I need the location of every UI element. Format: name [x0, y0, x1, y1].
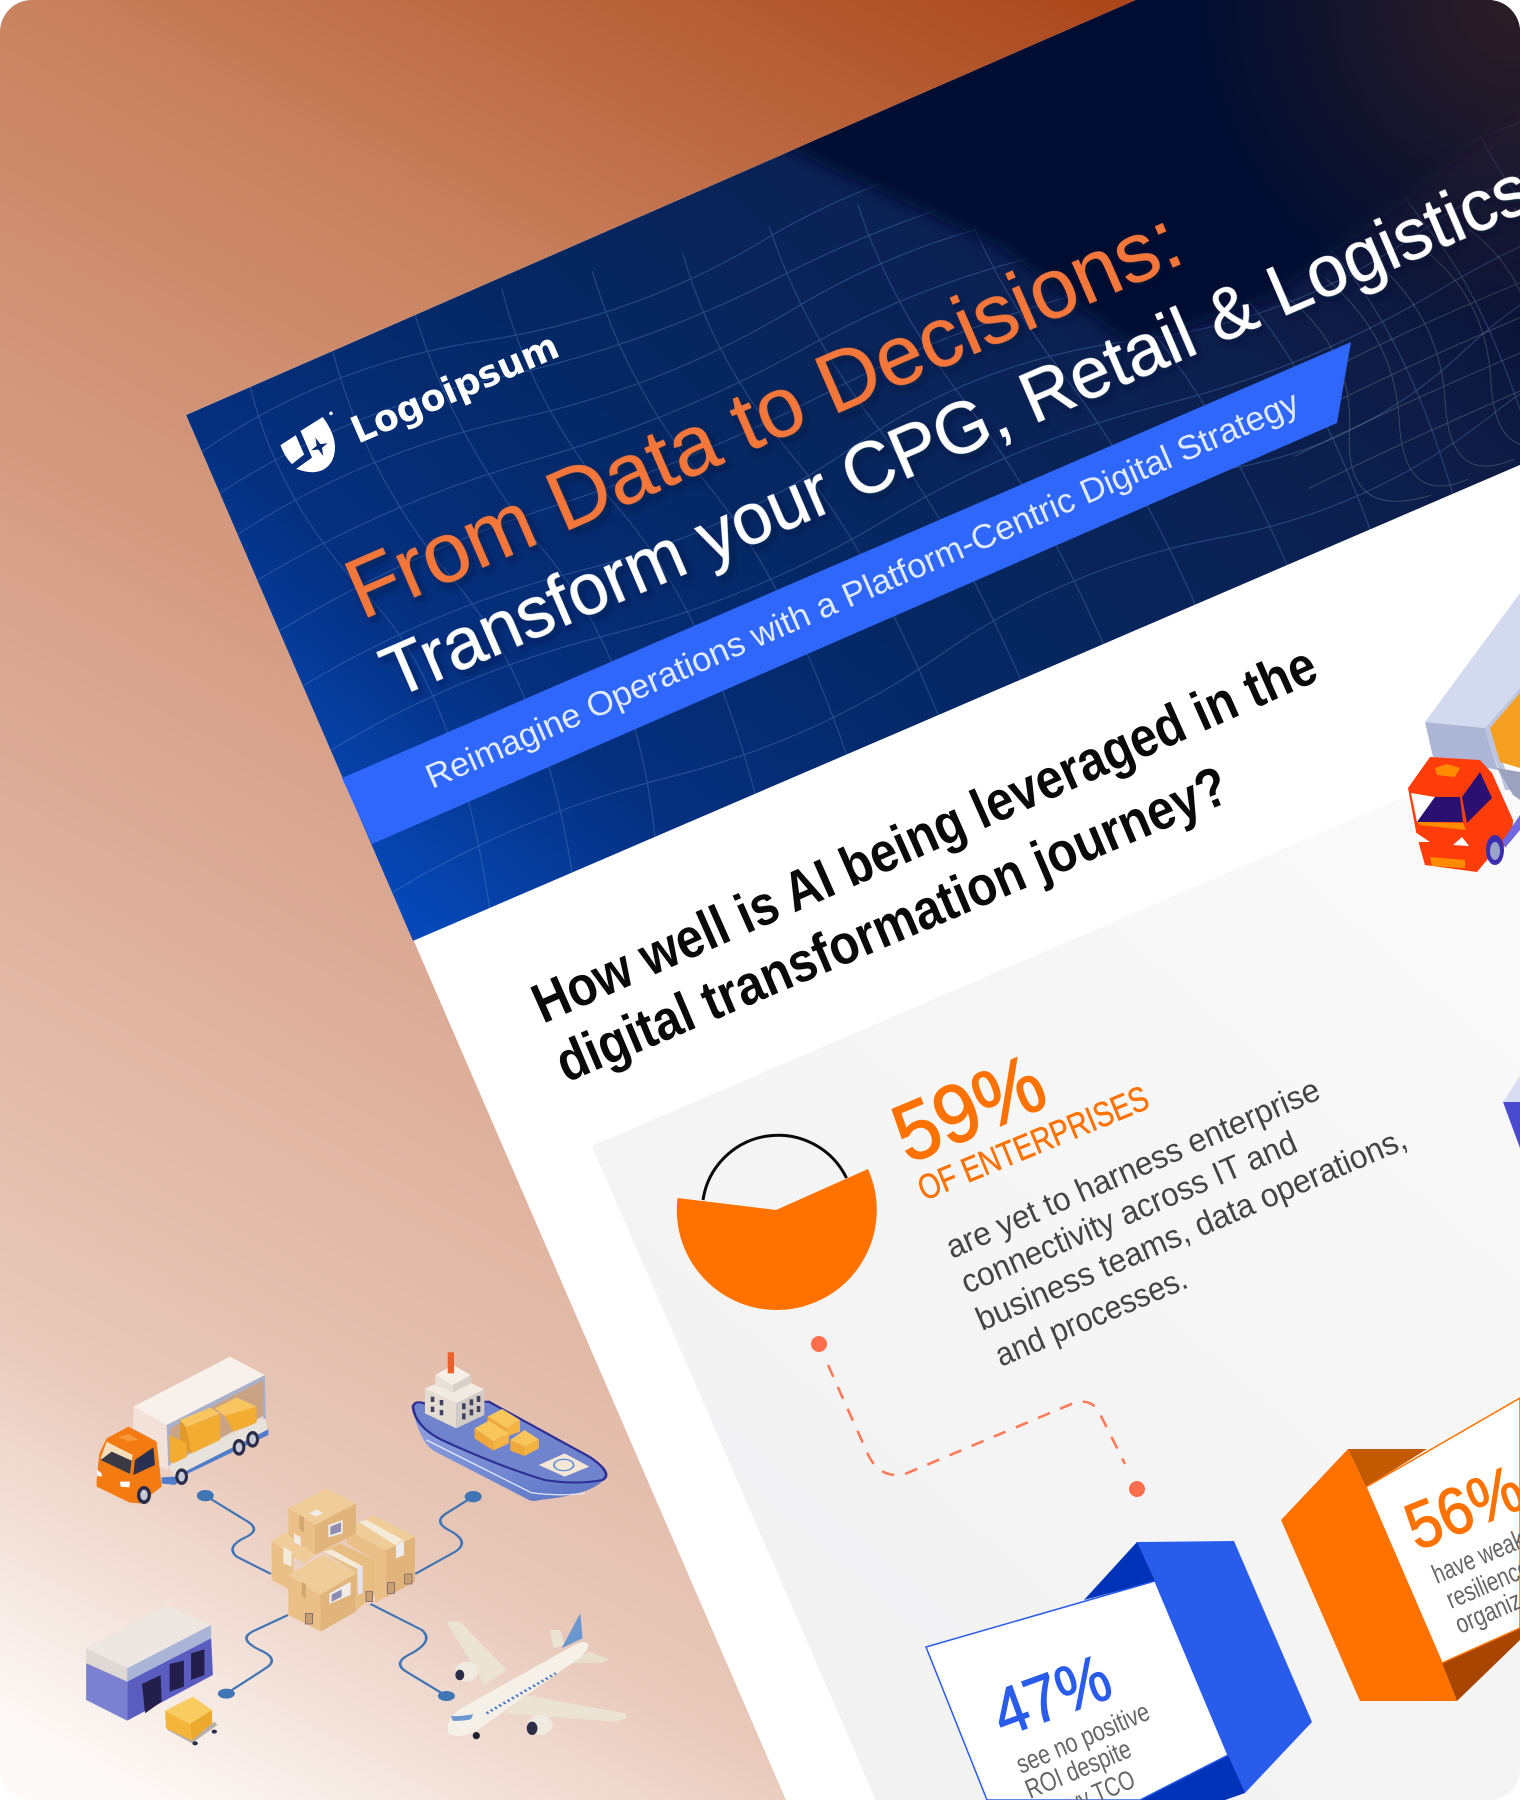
chart: 59% pie	[677, 1135, 877, 1310]
stat description: and processes.	[989, 1259, 1192, 1373]
logo	[280, 340, 559, 472]
panel: header banner	[186, 0, 1520, 947]
icon: logo shield	[280, 412, 335, 472]
icon: warehouse	[86, 1605, 217, 1745]
stat description: are yet to harness enterprise	[940, 1070, 1325, 1265]
title line 2: Transform your CPG, Retail & Logistics	[370, 149, 1520, 714]
logo wordmark: Logoipsum	[344, 324, 565, 452]
section heading: digital transformation journey?	[546, 753, 1237, 1094]
card: 47%	[926, 1541, 1312, 1800]
connectors and nodes	[197, 1490, 482, 1701]
stat label: OF ENTERPRISES	[912, 1079, 1154, 1208]
title line 1: From Data to Decisions:	[332, 191, 1195, 637]
icon: truck	[97, 1357, 268, 1504]
icon: parcels	[272, 1488, 415, 1632]
icon: cargo ship	[413, 1352, 606, 1501]
illustration: red delivery truck	[1408, 593, 1520, 872]
ribbon: subtitle	[342, 342, 1351, 844]
stat description	[940, 1070, 1412, 1373]
subtitle text: Reimagine Operations with a Platform-Centric Digital Strategy	[420, 383, 1305, 796]
section heading: How well is AI being leveraged in the	[522, 633, 1326, 1035]
stat description: business teams, data operations,	[970, 1120, 1412, 1337]
stat: 59%: 59%	[880, 1037, 1058, 1181]
illustration: edge of purple block	[1503, 1076, 1520, 1148]
card value: 47%	[982, 1640, 1121, 1750]
connector: dashed path	[811, 1336, 1145, 1497]
panel: grey statistics area	[592, 949, 1520, 1800]
card text	[1430, 1530, 1520, 1632]
illustration: logistics network	[86, 1352, 627, 1745]
card: 56%	[1281, 1398, 1520, 1701]
icon: airplane	[446, 1613, 627, 1739]
card text: see no positive	[1012, 1696, 1154, 1780]
stat description: connectivity across IT and	[955, 1123, 1302, 1300]
